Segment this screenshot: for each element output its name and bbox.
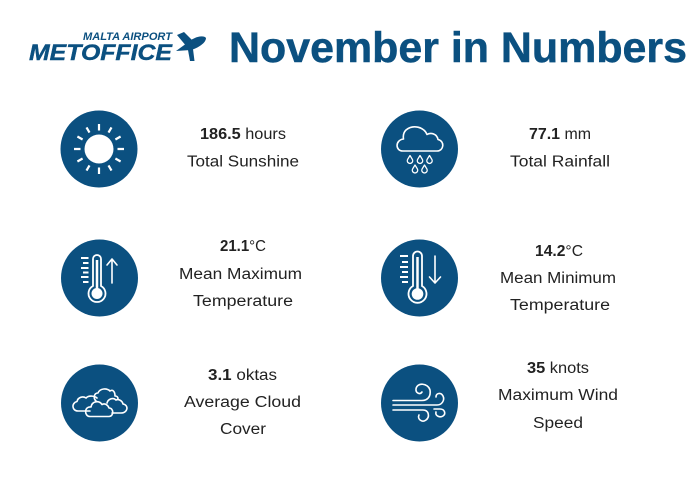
- icon: thermometer down: [381, 240, 458, 316]
- stat text: wind speed: Maximum Wind: [498, 387, 618, 404]
- icon: thermometer up: [61, 240, 138, 316]
- stat text: rainfall: 77.1 mm: [529, 126, 591, 143]
- stat text: min temperature: Mean Minimum: [500, 270, 616, 287]
- panel: mean minimum temperature: [381, 240, 616, 316]
- icon: wind: [381, 364, 458, 442]
- icon: clouds: [61, 364, 138, 442]
- stat text: rainfall: [510, 126, 610, 170]
- panel: total rainfall: [381, 110, 610, 188]
- icon: rain cloud: [381, 110, 458, 188]
- stat text: wind speed: [498, 360, 618, 432]
- stat text: sunshine: Total Sunshine: [187, 154, 299, 170]
- logo: Malta Airport Met Office: METOFFICE: [29, 40, 173, 65]
- stat text: sunshine: 186.5 hours: [200, 126, 286, 143]
- stat text: min temperature: 14.2°C: [535, 243, 583, 260]
- stat text: sunshine: [187, 126, 299, 170]
- stat text: wind speed: Speed: [533, 415, 583, 432]
- stat text: rainfall: Total Rainfall: [510, 154, 610, 170]
- stat text: min temperature: [500, 243, 616, 314]
- title: November in Numbers: [229, 24, 687, 72]
- stat text: min temperature: Temperature: [510, 297, 610, 314]
- logo: Malta Airport Met Office: MALTA AIRPORT: [83, 31, 173, 43]
- logo: Malta Airport Met Office: [29, 31, 206, 65]
- icon: aeroplane: [176, 32, 206, 61]
- stat text: max temperature: Temperature: [193, 293, 293, 310]
- stat text: max temperature: 21.1°C: [220, 238, 266, 255]
- stat text: max temperature: [179, 238, 302, 310]
- stat text: wind speed: 35 knots: [527, 360, 589, 377]
- panel: total sunshine: [60, 110, 299, 188]
- icon: sun: [60, 110, 138, 188]
- stat text: cloud cover: 3.1 oktas: [208, 367, 277, 384]
- panel: maximum wind speed: [381, 360, 618, 442]
- panel: mean maximum temperature: [61, 238, 302, 316]
- stat text: cloud cover: [184, 367, 301, 438]
- stat text: max temperature: Mean Maximum: [179, 266, 302, 283]
- stat text: cloud cover: Cover: [220, 421, 266, 438]
- panel: average cloud cover: [61, 364, 301, 442]
- stat text: cloud cover: Average Cloud: [184, 394, 301, 411]
